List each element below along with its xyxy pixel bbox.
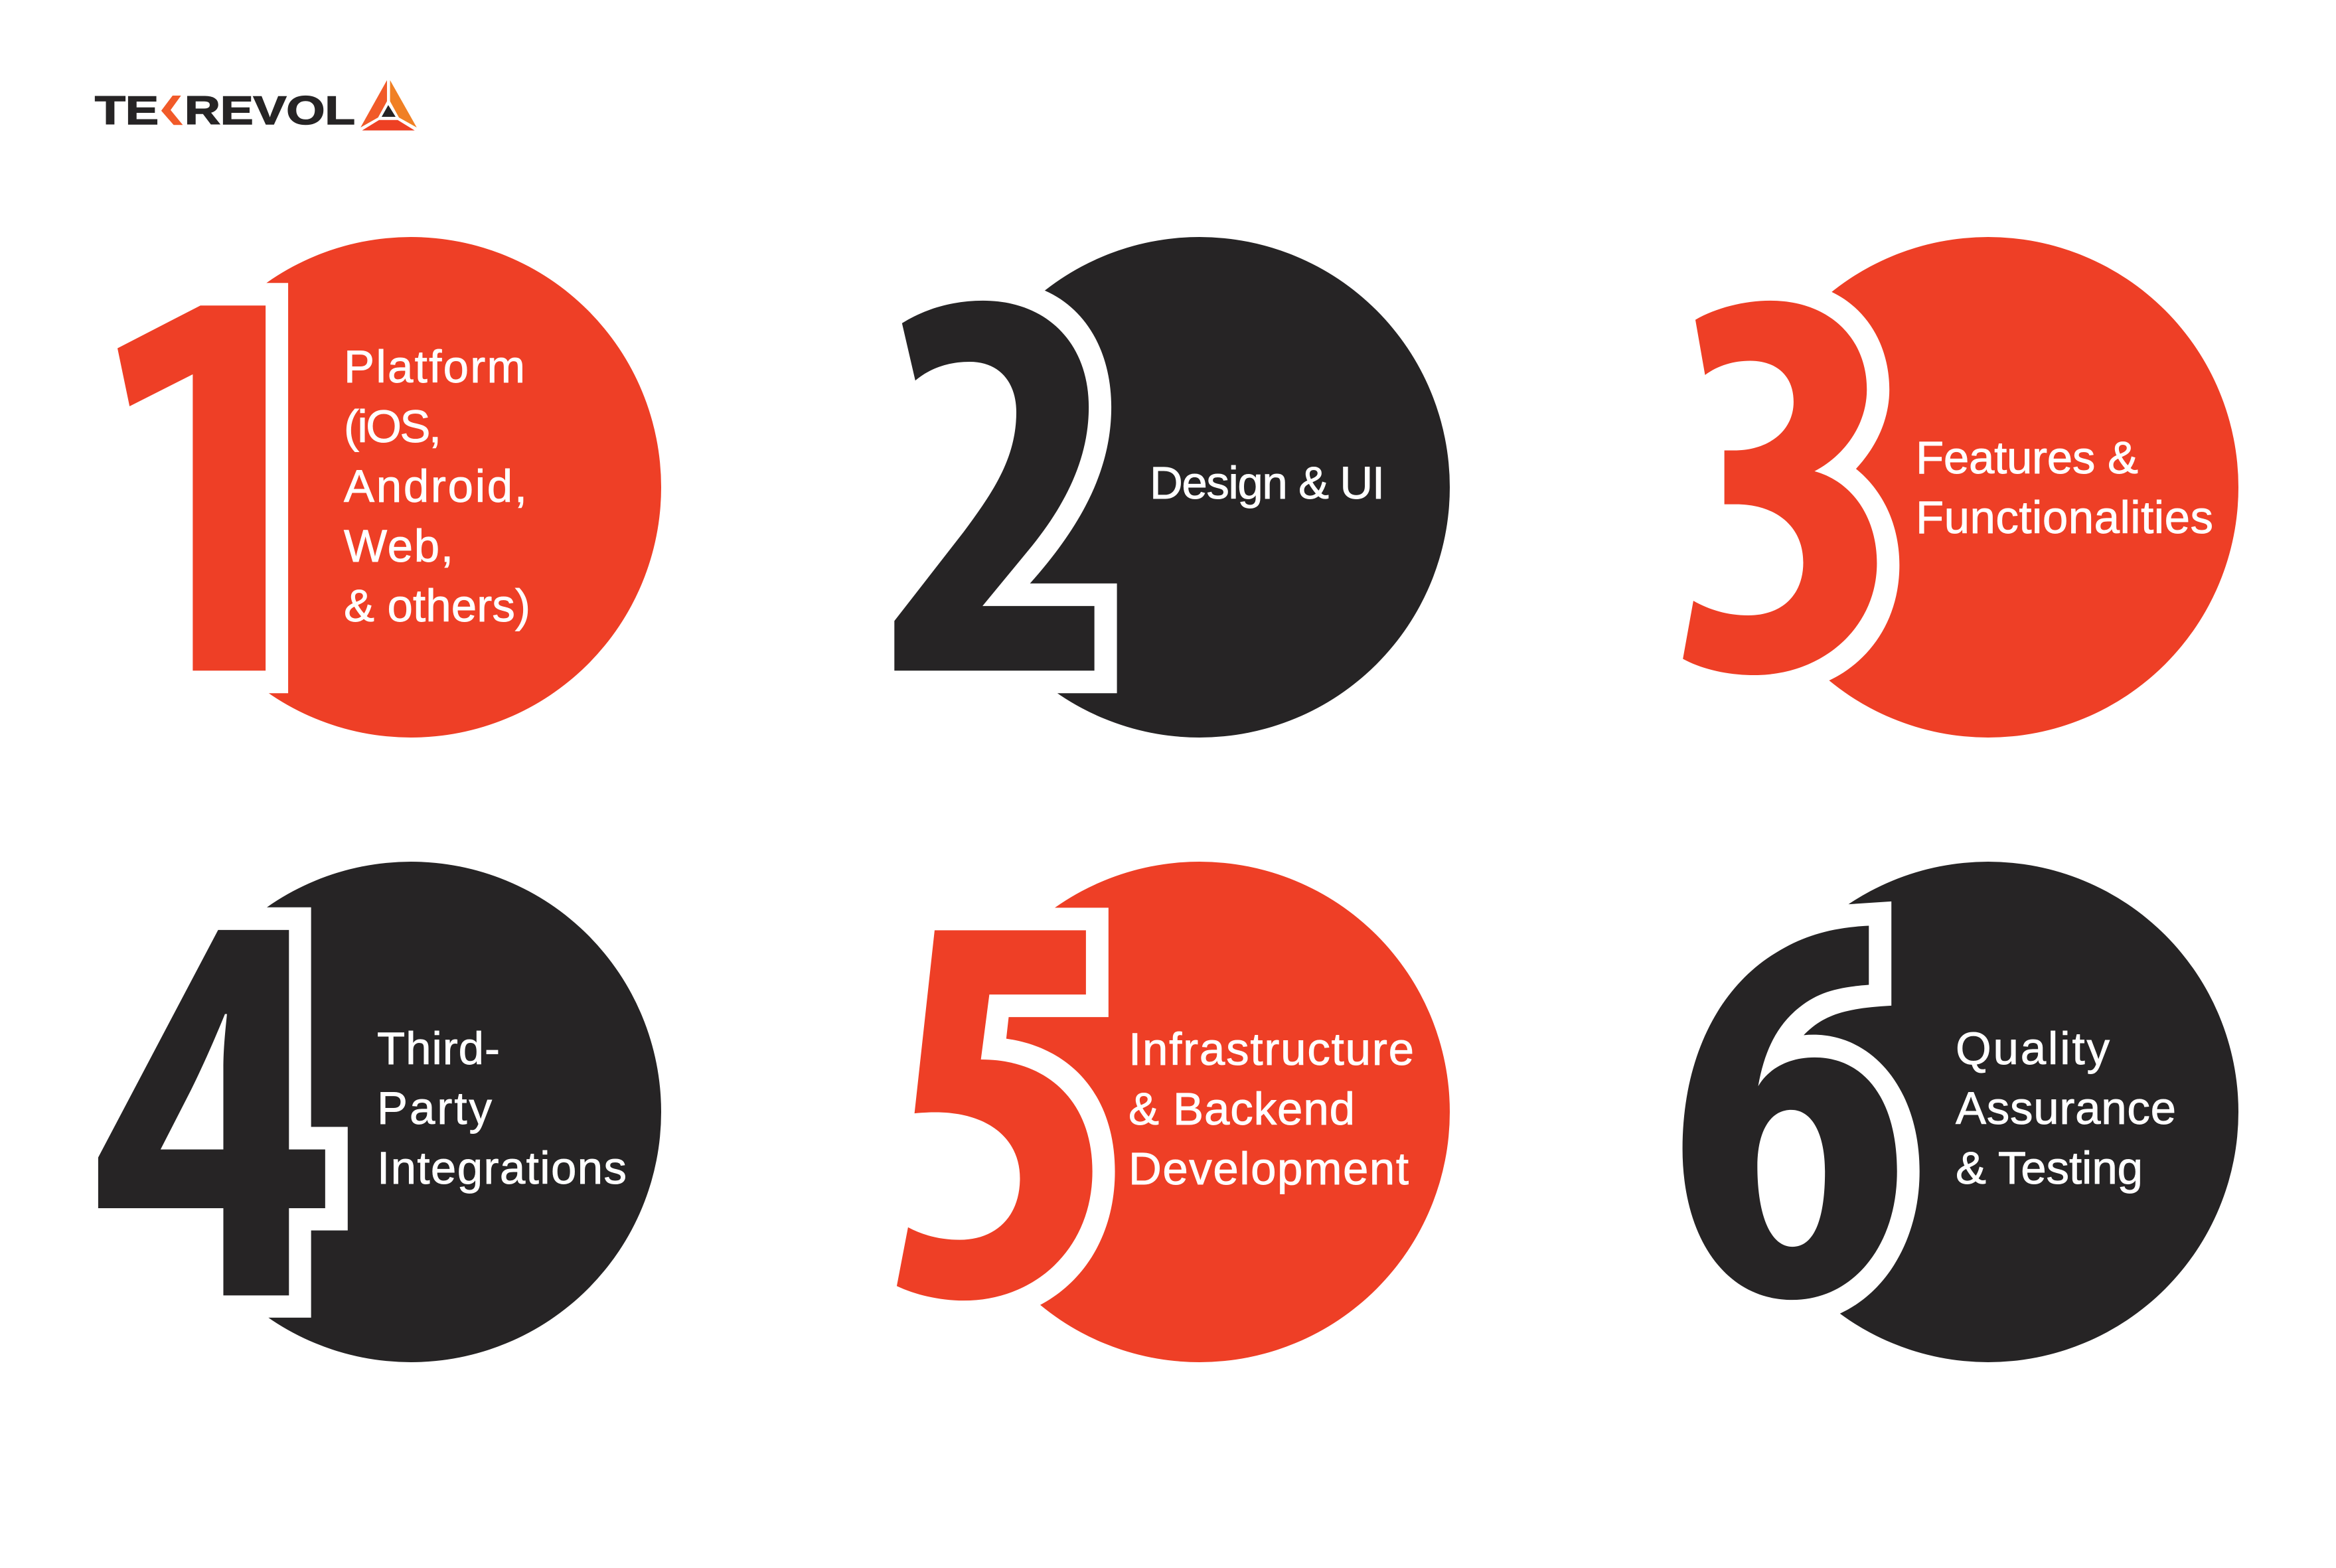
label: platform: Platform: [344, 341, 525, 392]
logo wordmark end: REVOL: [185, 88, 355, 133]
label: third-party integrations: Party: [377, 1083, 493, 1134]
panel 6: quality assurance: [1660, 862, 2238, 1362]
logo: TekRevol: [95, 80, 417, 133]
circle 6: [1738, 862, 2238, 1362]
numeral 1 with white cut-out: [66, 283, 288, 693]
label: infrastructure and backend development: & Backend: [1129, 1083, 1355, 1135]
label: platform: Web,: [344, 520, 453, 572]
label: infrastructure and backend development: [1129, 1024, 1414, 1194]
panel 2: design and UI: [863, 237, 1450, 738]
panel 4: third-party integrations: [66, 862, 661, 1362]
label: quality assurance and testing: Quality: [1956, 1023, 2110, 1074]
circle 5: [949, 862, 1450, 1362]
panel 3: features: [1660, 237, 2238, 738]
label: quality assurance and testing: [1956, 1023, 2176, 1194]
label: platform: & others): [344, 580, 530, 631]
label: platform: (iOS,: [344, 401, 441, 452]
numeral 4 with white cut-out: [66, 907, 348, 1318]
label: infrastructure and backend development: Development: [1129, 1143, 1409, 1194]
numeral 6 with white cut-out: [1660, 902, 1920, 1314]
numeral 5 with white cut-out: [863, 907, 1115, 1306]
logo triangle icon: [360, 80, 417, 130]
circle 2: [949, 237, 1450, 738]
label: features and functionalities: Functionalities: [1916, 492, 2213, 543]
circle 4: [161, 862, 661, 1362]
label: quality assurance and testing: & Testing: [1956, 1142, 2143, 1194]
numeral 2 with white cut-out: [863, 291, 1117, 693]
panel 1: platform: [66, 237, 661, 738]
label: features and functionalities: [1916, 432, 2213, 543]
label: third-party integrations: Integrations: [377, 1142, 627, 1194]
label: third-party integrations: [377, 1023, 627, 1194]
circle 1: [161, 237, 661, 738]
numeral 3 with white cut-out: [1660, 292, 1899, 680]
label: quality assurance and testing: Assurance: [1956, 1083, 2176, 1134]
label: third-party integrations: Third-: [377, 1023, 500, 1074]
logo chevron K: [161, 96, 183, 125]
label: platform: [344, 341, 530, 631]
logo wordmark start: TE: [95, 88, 159, 133]
circle 3: [1738, 237, 2238, 738]
label: design and UI: Design & UI: [1150, 457, 1385, 509]
panel 5: infrastructure: [863, 862, 1450, 1362]
label: features and functionalities: Features &: [1916, 432, 2138, 483]
label: infrastructure and backend development: Infrastructure: [1129, 1024, 1414, 1075]
label: platform: Android,: [344, 461, 527, 512]
